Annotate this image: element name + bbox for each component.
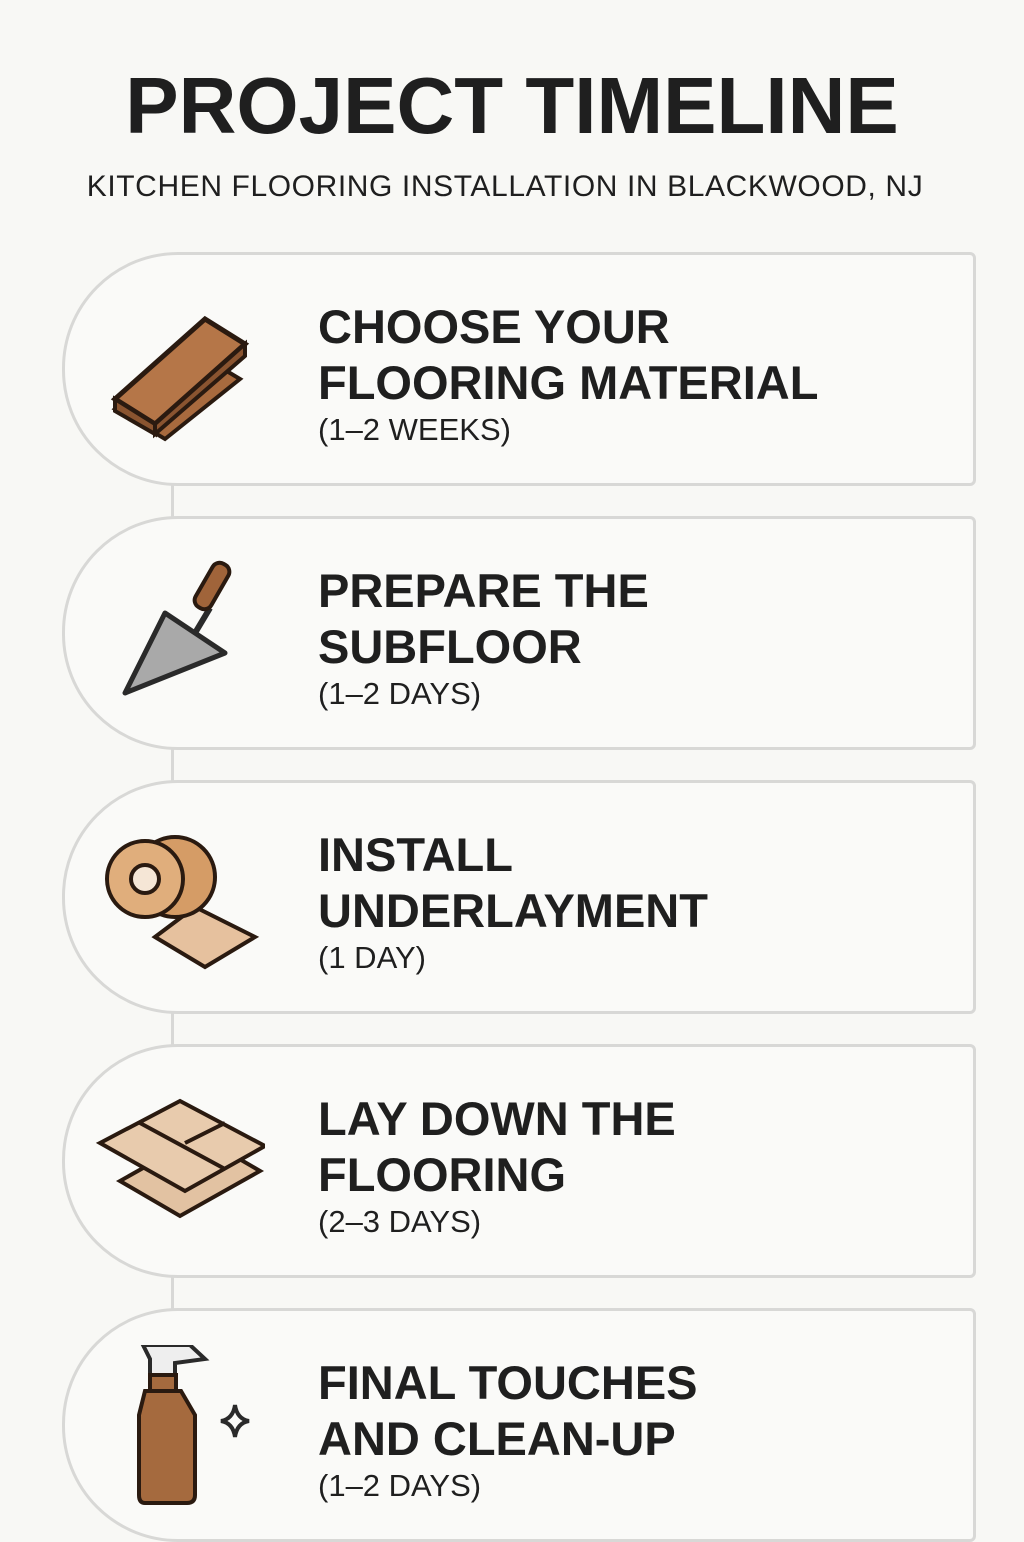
icon: floor tiles — [96, 1098, 265, 1218]
subtitle: KITCHEN FLOORING INSTALLATION IN BLACKWOOD, NJ — [87, 170, 923, 203]
panel: step 3 — [62, 780, 976, 1014]
text: step 3: INSTALL — [318, 828, 513, 881]
text: step 3: (1 DAY) — [318, 940, 426, 975]
connector lines — [171, 486, 174, 1308]
text: step 5 — [318, 1356, 698, 1503]
icon: wood planks — [110, 316, 250, 442]
panel: step 1 — [62, 252, 976, 486]
text: step 2: PREPARE THE — [318, 564, 649, 617]
text: step 3: UNDERLAYMENT — [318, 884, 708, 937]
text: step 4: FLOORING — [318, 1148, 566, 1201]
icon: trowel — [122, 560, 232, 696]
title: PROJECT TIMELINE — [125, 61, 899, 150]
text: step 5: AND CLEAN-UP — [318, 1412, 676, 1465]
text: step 3 — [318, 828, 708, 975]
panel: step 4 — [62, 1044, 976, 1278]
icon: underlayment roll — [105, 835, 260, 970]
icon: spray bottle — [137, 1345, 250, 1505]
text: step 2: (1–2 DAYS) — [318, 676, 481, 711]
text: step 4: (2–3 DAYS) — [318, 1204, 481, 1239]
text: step 4 — [318, 1092, 676, 1239]
panel: step 5 — [62, 1308, 976, 1542]
panel: step 2 — [62, 516, 976, 750]
text: step 5: (1–2 DAYS) — [318, 1468, 481, 1503]
text: step 4: LAY DOWN THE — [318, 1092, 676, 1145]
text: step 1: FLOORING MATERIAL — [318, 356, 818, 409]
text: step 5: FINAL TOUCHES — [318, 1356, 698, 1409]
text: step 1: (1–2 WEEKS) — [318, 412, 511, 447]
text: step 1: CHOOSE YOUR — [318, 300, 670, 353]
text: step 2: SUBFLOOR — [318, 620, 582, 673]
text: step 2 — [318, 564, 649, 711]
text: step 1 — [318, 300, 818, 447]
